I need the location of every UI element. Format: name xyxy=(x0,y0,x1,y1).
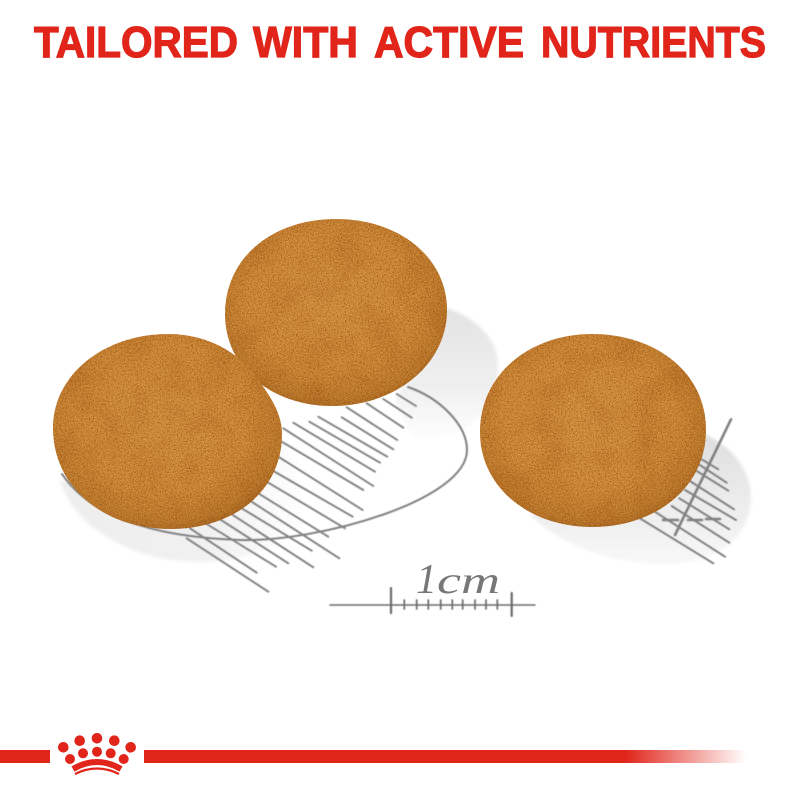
ruler label: cm xyxy=(437,560,500,602)
title: WITH xyxy=(253,19,358,67)
sketch: circle and hatching under left kibbles xyxy=(62,387,467,592)
ruler line and ticks xyxy=(330,588,535,616)
kibble: right xyxy=(480,334,706,527)
sketch: hatching under right kibble xyxy=(638,419,736,563)
shadow: right kibble xyxy=(530,432,751,564)
ruler label: 1 xyxy=(416,557,437,603)
shadow: left kibble xyxy=(60,440,307,562)
title: ACTIVE xyxy=(374,19,524,67)
title: NUTRIENTS xyxy=(541,19,766,67)
footer bar: left xyxy=(0,750,50,763)
kibble: left xyxy=(53,334,282,529)
shadow: top kibble xyxy=(395,306,498,443)
kibble: top xyxy=(225,219,447,406)
scale: 1 cm ruler xyxy=(330,557,535,616)
icon: crown logo xyxy=(58,733,136,774)
footer bar: right fading xyxy=(144,750,746,763)
title: TAILORED xyxy=(34,19,238,67)
title xyxy=(34,19,766,67)
